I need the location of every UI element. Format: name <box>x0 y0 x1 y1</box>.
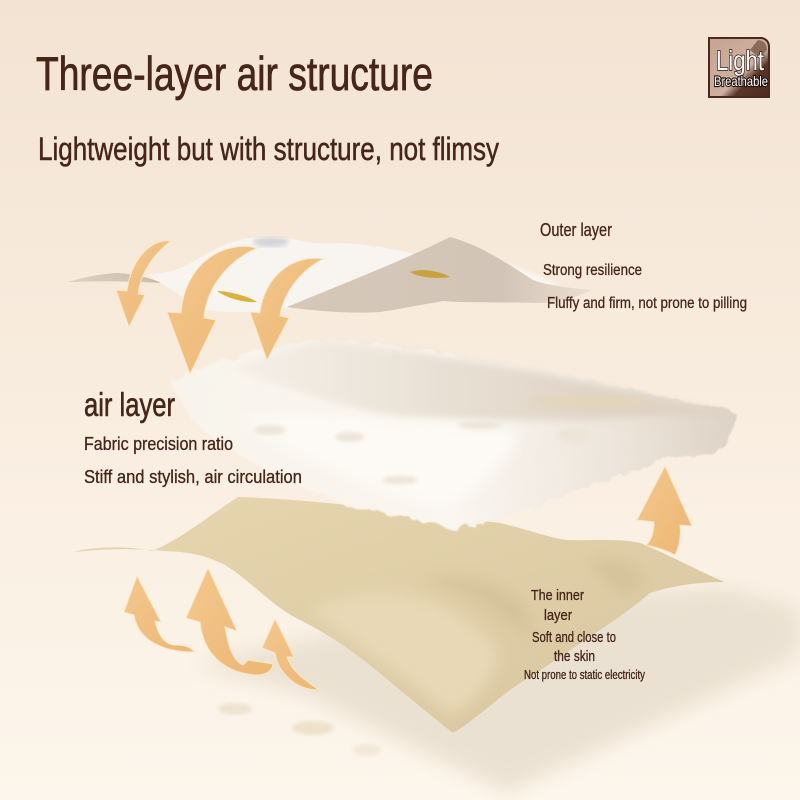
arrow up left <box>124 576 195 652</box>
cloud: gold print showing through <box>530 396 650 408</box>
arrow down medium <box>250 258 323 360</box>
subtitle: Lightweight but with structure, not flimsy <box>38 131 499 167</box>
arrow down small <box>116 241 171 327</box>
arrows: air flowing up through inner layer <box>124 466 692 690</box>
outer fabric layer <box>67 237 592 313</box>
cloud: white fluffy front side <box>169 338 735 530</box>
cloud air layer <box>169 338 735 530</box>
inner fabric layer <box>74 497 725 733</box>
inner fabric: dark fold right <box>590 559 642 594</box>
badge: light breathable: Light <box>716 45 764 76</box>
text block: outer layer: Strong resilience <box>543 262 642 279</box>
arrows: air flowing down through outer layer <box>116 241 323 374</box>
text block: air layer: Fabric precision ratio <box>84 434 233 454</box>
text block: inner layer: The inner <box>531 587 584 604</box>
text block: inner layer: the skin <box>554 648 595 665</box>
cloud: bright centre of the front side <box>240 417 520 505</box>
cloud: beige top face <box>230 340 730 420</box>
text block: inner layer: Soft and close to <box>532 629 616 646</box>
inner fabric: dark fold <box>420 578 531 640</box>
text block: air layer <box>84 386 302 487</box>
outer fabric: white sliver behind the peak <box>505 262 560 290</box>
outer fabric: white face <box>147 237 415 312</box>
text block: air layer: Stiff and stylish, air circulation <box>84 467 302 487</box>
text block: inner layer <box>524 587 646 682</box>
outer fabric: tan reverse face <box>287 237 592 313</box>
arrow down large <box>167 246 257 374</box>
arrow up right <box>637 466 692 555</box>
inner fabric: pale lower fold <box>310 593 496 715</box>
arrow up centre <box>186 568 273 675</box>
badge: light breathable: Breathable <box>714 73 768 89</box>
text block: air layer: air layer <box>84 386 175 423</box>
text block: inner layer: Not prone to static electricity <box>524 668 646 682</box>
text block: outer layer: Fluffy and firm, not prone to pilling <box>547 295 747 312</box>
outer fabric: far edge strip <box>67 273 162 283</box>
text block: outer layer <box>540 220 747 312</box>
text block: outer layer: Outer layer <box>540 220 612 240</box>
title: Three-layer air structure <box>36 47 433 100</box>
cloud: soft dimples on the front side <box>254 421 593 484</box>
icon: gold leaf left <box>217 291 257 302</box>
badge: light breathable <box>709 38 769 97</box>
fabric shadow on the ground <box>195 588 800 792</box>
icon: blue-grey patch <box>253 237 289 247</box>
icon: gold leaf right <box>410 270 450 278</box>
text block: inner layer: layer <box>544 607 572 624</box>
arrow up small <box>262 619 319 690</box>
